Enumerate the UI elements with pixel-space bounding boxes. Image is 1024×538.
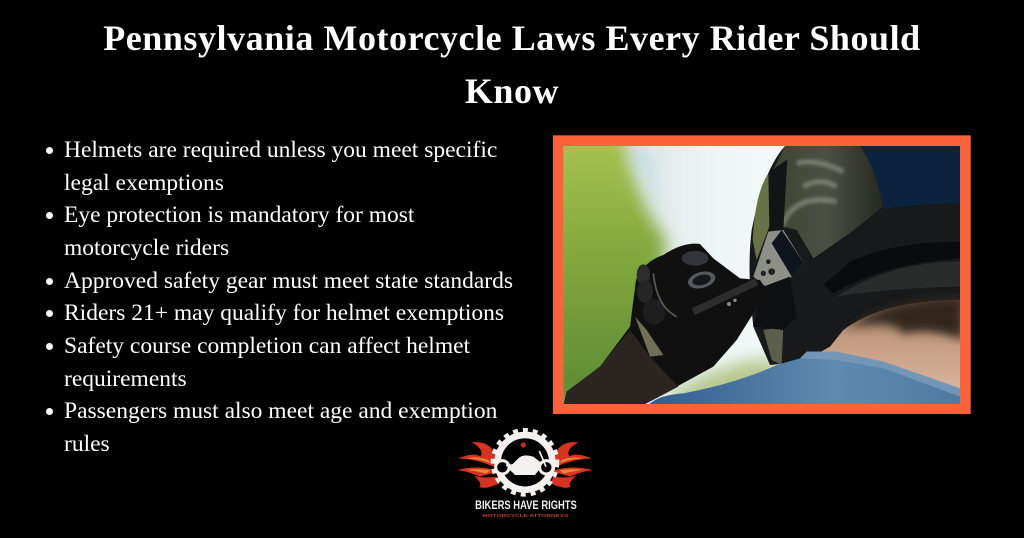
helmet shell [770,146,883,258]
intercom device [753,230,804,290]
photo panel: rider with helmet and glove, orange frame [553,135,971,414]
title: Pennsylvania Motorcycle Laws Every Rider Should [103,18,921,58]
denim jacket [647,352,960,407]
logo: Bikers Have Rights [458,428,592,518]
bullet: safety course: Safety course completion can affect helmet [64,333,470,359]
bullet: helmets: Helmets are required unless you meet specific [64,137,497,163]
icon: gear ring with motorcycle [493,430,557,495]
neck and hair [822,300,960,388]
bullet: safety course: requirements [64,366,187,392]
bullet: eye protection [46,202,414,261]
photo [563,146,960,404]
logo wordmark: BIKERS HAVE RIGHTS [475,498,577,512]
bullet: passengers: rules [64,431,110,457]
helmet lower band detail [823,242,960,293]
icon: left flames [457,442,499,488]
logo tagline: MOTORCYCLE ATTORNEYS [482,513,568,518]
bullet: passengers: Passengers must also meet age and exemption [64,398,497,424]
icon: right flames [551,442,593,488]
title: Know [465,71,559,111]
bullet: helmets [46,137,497,196]
bullet: riders 21+: Riders 21+ may qualify for helmet exemptions [64,300,504,326]
bullet: safety course [46,333,470,392]
bullet: eye protection: Eye protection is mandatory for most [64,202,414,228]
title [103,18,921,111]
bullet list of laws [46,137,513,457]
orange frame [553,135,971,414]
bullet: helmets: legal exemptions [64,170,224,196]
bullet: eye protection: motorcycle riders [64,235,229,261]
bullet: safety gear: Approved safety gear must meet state standards [64,268,513,294]
glove [563,244,767,405]
helmet silhouette [750,146,960,365]
bullet: passengers [46,398,498,457]
